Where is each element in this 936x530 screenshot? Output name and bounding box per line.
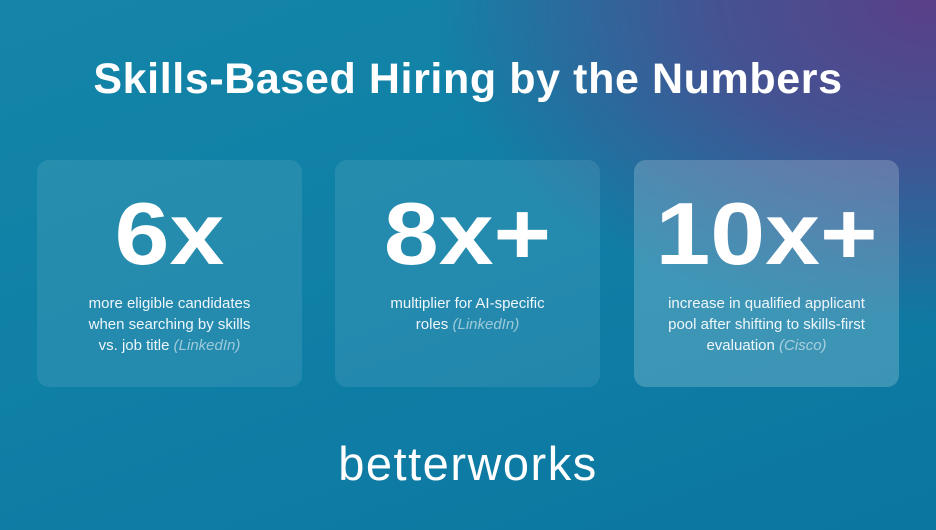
- stat description: roles (LinkedIn): [416, 316, 519, 333]
- stat number: 8x+: [384, 184, 551, 283]
- stat number: 10x+: [655, 184, 878, 283]
- stat description: more eligible candidates: [89, 295, 250, 312]
- card: 10x+: [634, 160, 899, 387]
- card: 8x+: [335, 160, 600, 387]
- stat description: evaluation (Cisco): [706, 337, 827, 354]
- title: Skills-Based Hiring by the Numbers: [93, 55, 843, 103]
- stat description: when searching by skills: [89, 316, 250, 333]
- card: 6x: [37, 160, 302, 387]
- stat number: 6x: [115, 184, 224, 283]
- stat description: [668, 295, 865, 354]
- stat description: pool after shifting to skills-first: [668, 316, 865, 333]
- stat description: multiplier for AI-specific: [390, 295, 545, 312]
- stat description: [390, 295, 545, 333]
- stat description: [88, 295, 250, 354]
- logo: betterworks: betterworks: [338, 437, 598, 490]
- stat description: vs. job title (LinkedIn): [99, 337, 240, 354]
- stat description: increase in qualified applicant: [668, 295, 865, 312]
